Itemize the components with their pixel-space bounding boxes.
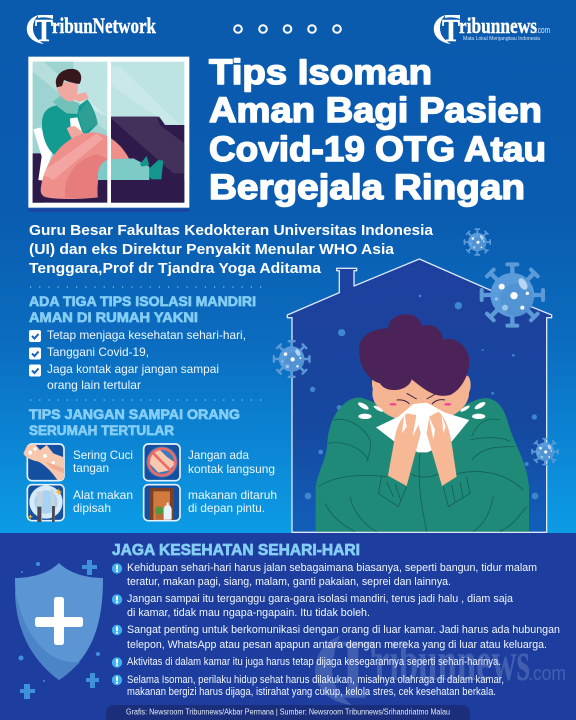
logo: TribunNetwork: T: [35, 12, 53, 48]
footer credit bar: Grafis: Newsroom Tribunnews/Akbar Permana | Sumber: Newsroom Tribunnews/Srihandriatmo Malau: [126, 708, 450, 716]
title: Bergejala Ringan: [209, 168, 525, 207]
icon: washing hands: [23, 444, 64, 481]
title: Tips Isoman: [209, 53, 432, 92]
tip icons: [23, 444, 180, 522]
logo: Tribunnews.com: [434, 12, 550, 48]
person: hair: [359, 314, 469, 396]
title: [209, 53, 546, 207]
heading: household tips: [29, 406, 240, 438]
bullet text: Aktivitas di dalam kamar itu juga harus tetap dijaga kesegarannya seperti sehari-harinya.: [127, 656, 501, 668]
heading: household tips: SERUMAH TERTULAR: [29, 422, 174, 438]
logo: Tribunnews.com: ribunnews: [459, 13, 537, 38]
virus large: [482, 264, 543, 326]
decorative dots row: [234, 25, 341, 33]
tip labels: di depan pintu.: [188, 501, 265, 515]
checklist: Tanggani Covid-19,: [47, 345, 149, 359]
subtitle text block: [29, 222, 434, 277]
tip labels: tangan: [73, 461, 109, 475]
heading: household tips: TIPS JANGAN SAMPAI ORANG: [29, 406, 240, 422]
man: sweater: [42, 99, 98, 157]
man: blanket: [41, 132, 129, 199]
virus right: [532, 439, 558, 465]
checklist: Tetap menjaga kesehatan sehari-hari,: [47, 328, 246, 342]
footer credit bar: [106, 705, 470, 720]
icon: no contact: [144, 444, 180, 481]
divider dots 1: [30, 286, 264, 288]
tip labels: [73, 448, 277, 515]
background: [0, 0, 576, 534]
watermark: T: [330, 621, 376, 717]
checklist: Jaga kontak agar jangan sampai: [47, 362, 219, 376]
bullet text: Sangat penting untuk berkomunikasi dengan orang di luar kamar. Jadi harus ada hubungan: [127, 624, 560, 636]
person: hands: [388, 413, 421, 486]
divider dots 2: [30, 399, 264, 401]
tip labels: Alat makan: [73, 488, 133, 502]
icon: food at door: [144, 485, 180, 521]
title: Aman Bagi Pasien: [209, 91, 542, 130]
bullet text: di kamar, tidak mau ngapa-ngapain. Itu tidak boleh.: [127, 607, 370, 619]
bullet icons: [112, 563, 122, 685]
bullet text: teratur, makan pagi, siang, malam, ganti pakaian, seprei dan lainnya.: [127, 576, 451, 588]
tip labels: makanan ditaruh: [188, 488, 277, 502]
tip labels: dipisah: [73, 501, 111, 515]
virus left: [274, 341, 309, 377]
tip labels: Sering Cuci: [73, 448, 133, 462]
tip labels: Jangan ada: [188, 448, 249, 462]
bullet text: telepon, WhatsApp atau pesan apapun antara dengan mereka yang di luar atau keluarga.: [127, 639, 547, 651]
virus top: [464, 229, 490, 255]
logo: TribunNetwork: [27, 12, 157, 48]
floating particles: [305, 295, 538, 499]
house illustration: [274, 229, 558, 532]
heading: three tips: AMAN DI RUMAH YAKNI: [29, 309, 198, 325]
watermark: .com: [528, 663, 566, 685]
tip labels: kontak langsung: [188, 462, 275, 476]
checklist: [29, 328, 246, 392]
logo: Tribunnews.com: T: [442, 12, 460, 48]
title: Covid-19 OTG Atau: [209, 130, 546, 169]
icon: separate cutlery: [27, 485, 64, 522]
bullet text: Jangan sampai itu terganggu gara-gara isolasi mandiri, terus jadi halu , diam saja: [127, 593, 513, 605]
person: tissue: [376, 403, 469, 452]
panel heading: JAGA KESEHATAN SEHARI-HARI: [112, 542, 360, 559]
checklist: orang lain tertular: [47, 378, 141, 392]
heading: three tips: [29, 293, 256, 325]
subtitle text block: (UI) dan eks Direktur Penyakit Menular WHO Asia: [29, 241, 395, 258]
shield icon: [15, 560, 103, 699]
watermark: [315, 621, 566, 717]
bullet text: Selama Isoman, perilaku hidup sehat harus dilakukan, misalnya olahraga di dalam kamar,: [127, 674, 504, 686]
heading: three tips: ADA TIGA TIPS ISOLASI MANDIRI: [29, 293, 256, 309]
subtitle text block: Tenggara,Prof dr Tjandra Yoga Aditama: [29, 260, 322, 277]
person: sweater: [316, 397, 529, 532]
house outline: [287, 259, 552, 532]
panel: daily health: [0, 533, 576, 720]
bullet text: Kehidupan sehari-hari harus jalan sebagaimana biasanya, seperti bangun, tidur malam: [127, 562, 537, 574]
logo: TribunNetwork: ribunNetwork: [52, 13, 157, 38]
illustration: sick man at window: [28, 57, 189, 212]
bullet text: [127, 562, 560, 698]
logo: Tribunnews.com: Mata Lokal Menjangkau Indonesia: [463, 36, 540, 42]
person: face: [372, 364, 469, 423]
logo: Tribunnews.com: .com: [536, 25, 550, 35]
bullet text: makanan bergizi harus dijaga, istirahat yang cukup, kelola stres, cek kesehatan berkala.: [127, 686, 496, 698]
subtitle text block: Guru Besar Fakultas Kedokteran Universitas Indonesia: [29, 222, 434, 239]
